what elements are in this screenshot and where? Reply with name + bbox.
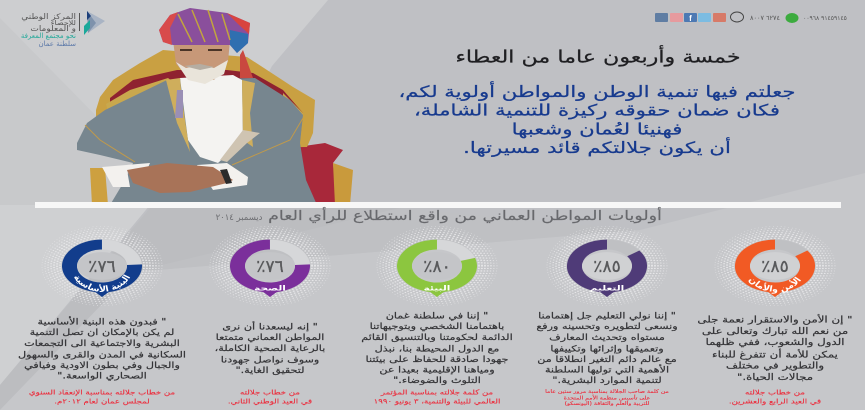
quote: environment: باهتمامنا الشخصي وبتوجيهاتنا — [370, 322, 504, 332]
source: security: من خطاب جلالته — [745, 389, 805, 397]
donut: security 85% — [714, 226, 836, 306]
quote: education: وتعميقها وإثرائها وتكييفها — [550, 343, 664, 353]
quote: security: يمكن للأمة أن تتفرغ للبناء — [712, 349, 838, 359]
quote: security — [697, 314, 853, 382]
quote: environment: ومياهنا الإقليمية بعيدا عن — [379, 365, 495, 375]
source: education: من كلمة صاحب الجلالة بمناسبة مرور ستين عاما — [545, 389, 669, 395]
source: security — [729, 389, 821, 406]
quote: security: الدول والشعوب، ففي ظلهما — [706, 337, 844, 348]
quote: education: ونسعى لتطويره وتحسينه ورفع — [536, 322, 678, 332]
source: infrastructure — [29, 389, 175, 406]
quote: health — [215, 321, 325, 376]
donut: environment 80% — [377, 226, 497, 306]
contact icons: ٨٠٠٧ ٦٢٧٤ — [750, 14, 780, 22]
quote: education: " إننا نولي التعليم جل إهتمامنا — [538, 311, 676, 321]
quote: education: لتنمية الموارد البشرية." — [552, 376, 662, 386]
quote: security: " إن الأمن والاستقرار نعمة جلى — [697, 314, 853, 325]
percentages: ٨٥٪ — [593, 257, 621, 277]
quote: environment: جهودا صادقة للحفاظ على بيئتنا — [366, 354, 508, 364]
quote: infrastructure: والجبال وفي بطون الاودية وفيافي — [24, 360, 180, 370]
donut: health 76%: الصحة — [254, 285, 286, 293]
source: environment: العالمي للبيئة والتنمية، ٣ يونيو ١٩٩٠ — [374, 397, 500, 405]
donut: infrastructure 76%: البنية الأساسية — [74, 274, 130, 292]
donut: education 85%: التعليم — [590, 285, 624, 293]
quote: security: من نعم الله تبارك وتعالى على — [702, 326, 848, 336]
contact icons — [655, 12, 847, 23]
quote: environment: مع الدول المحيطة بنا، نبذل — [375, 343, 499, 353]
source: health: من خطاب جلالته — [240, 389, 300, 397]
quote: environment: التلوث والضوضاء." — [393, 376, 481, 386]
source: education: على تأسيس منظمة الأمم المتحدة — [564, 395, 650, 401]
source: education: للتربية والعلم والثقافة (اليونسكو) — [565, 401, 649, 407]
quote: infrastructure — [18, 316, 186, 381]
percentages: ٧٦٪ — [88, 257, 116, 277]
source: education — [545, 389, 669, 407]
source: infrastructure: لمجلس عمان لعام ٢٠١٢م. — [54, 397, 150, 405]
message: فكان ضمان حقوقه ركيزة للتنمية الشاملة، — [414, 101, 780, 119]
source: health — [228, 389, 312, 406]
source: infrastructure: من خطاب جلالته بمناسبة الإنعقاد السنوي — [29, 389, 175, 397]
quote: security: مجالات الحياة." — [737, 372, 813, 382]
quote: education: مع عالم دائم التغير انطلاقا من — [537, 354, 677, 364]
logo: سلطنة عمان — [38, 40, 76, 48]
logo — [21, 11, 105, 48]
survey heading: أولويات المواطن العماني من واقع استطلاع للرأي العام — [268, 209, 662, 224]
quote: environment: " إننا في سلطنة غمان — [386, 311, 488, 321]
survey date: ديسمبر ٢٠١٤ — [216, 213, 262, 223]
donut: environment 80%: البيئة — [424, 285, 450, 293]
source: security: في العيد الرابع والعشرين. — [729, 397, 821, 405]
contact icons: ٠٠٩٦٨ ٩١٤٥٩١٤٥ — [803, 15, 847, 22]
title: خمسة وأربعون عاما من العطاء — [455, 47, 741, 67]
logo: المركز الوطني — [21, 12, 76, 21]
percentages: ٧٦٪ — [256, 257, 284, 277]
donut: infrastructure 76% — [42, 226, 162, 306]
source: environment: من كلمة جلالته بمناسبة المؤتمر — [381, 389, 493, 397]
message: أن يكون جلالتكم قائد مسيرتها. — [463, 138, 731, 157]
source: health: في العيد الوطني الثاني. — [228, 397, 312, 405]
quote: education: مستواه وتحديث المعارف — [549, 333, 665, 342]
message — [398, 81, 796, 157]
logo: و المعلومات — [30, 24, 76, 33]
quote: health: " إنه ليسعدنا أن نرى — [222, 322, 318, 332]
percentages — [88, 257, 789, 277]
quote: environment: الدائمة لحكومتنا وبالتنسيق القائم — [361, 333, 513, 342]
quote: education — [536, 311, 678, 386]
quote: infrastructure: لم يكن بالإمكان ان تصل التنمية — [30, 328, 174, 338]
donut: security 85%: الأمن والأمان — [748, 276, 801, 294]
donut: health 76% — [210, 226, 330, 306]
quote: infrastructure: البشرية والاجتماعية الى التجمعات — [24, 339, 180, 348]
quote: environment — [361, 311, 513, 386]
contact icons: f — [689, 14, 692, 23]
quote: infrastructure: السكانية في المدن والقرى والسهول — [18, 349, 186, 359]
quote: education: الأهمية التي توليها السلطنة — [545, 365, 669, 375]
donut: education 85% — [547, 226, 667, 306]
quote: infrastructure: " فبدون هذه البنية الأساسية — [38, 317, 166, 327]
quote: health: وسوف نواصل جهودنا — [221, 354, 319, 364]
white bar — [35, 202, 841, 208]
logo: للإحصاء — [51, 19, 76, 27]
quote: infrastructure: الصحاري الواسعة." — [57, 371, 147, 381]
source: environment — [374, 389, 500, 406]
message: فهنيئا لعُمان وشعبها — [512, 119, 682, 138]
percentages: ٨٥٪ — [761, 257, 789, 277]
quote: health: المواطن العماني متمتعا — [216, 333, 324, 343]
quote: security: والتطوير في مختلف — [726, 360, 824, 371]
logo: نحو مجتمع المعرفة — [21, 32, 76, 40]
message: جعلتم فيها تنمية الوطن والمواطن أولوية لكم، — [398, 82, 796, 100]
percentages: ٨٠٪ — [423, 257, 451, 277]
quote: health: لتحقيق الغاية." — [235, 365, 305, 375]
quote: health: بالرعاية الصحية الكاملة، — [215, 344, 325, 353]
